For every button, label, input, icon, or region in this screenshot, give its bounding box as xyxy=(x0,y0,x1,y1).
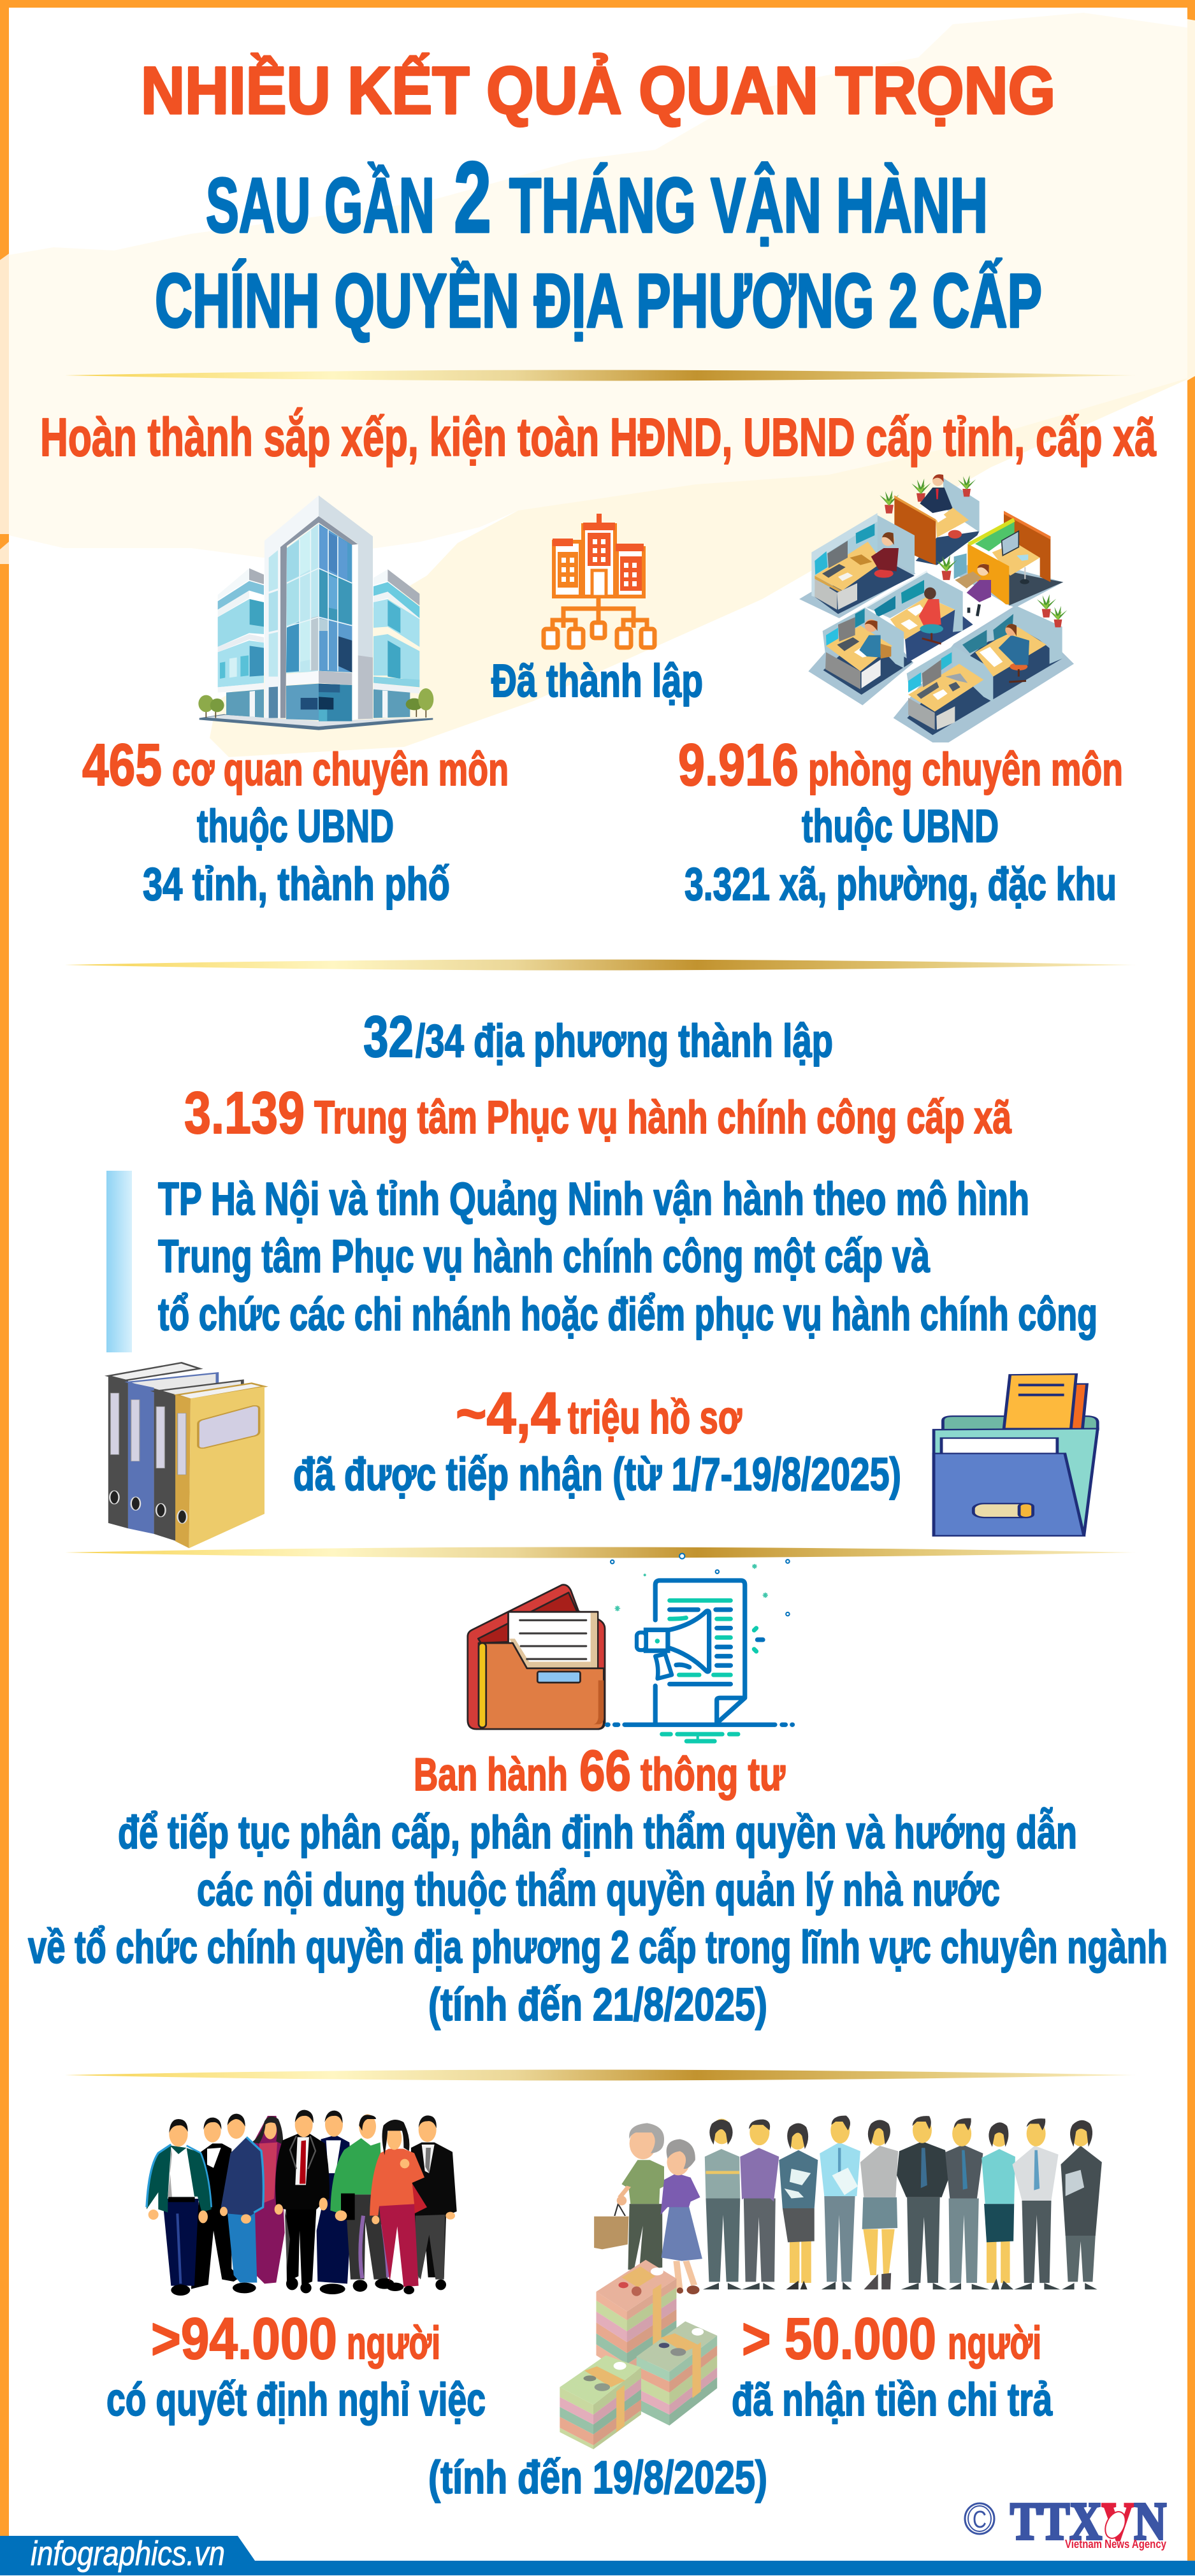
background cream shape xyxy=(0,13,1195,757)
stat: 50.000 người: người xyxy=(948,2318,1041,2369)
person 1 xyxy=(703,2118,742,2289)
stat: 3.139 trung tâm xyxy=(184,1080,1012,1146)
title line 1: NHIỀU KẾT QUẢ QUAN TRỌNG xyxy=(141,52,1055,128)
icon: document folder xyxy=(468,1585,605,1729)
right stat: 9.916 phòng chuyên môn: thuộc UBND xyxy=(802,801,999,852)
left stat: 465 cơ quan chuyên môn: thuộc UBND xyxy=(197,801,394,852)
stat: 32/34 địa phương: 32 xyxy=(363,1004,414,1069)
icon: trees xyxy=(198,688,433,718)
person 8 xyxy=(981,2122,1015,2289)
top right cubicle xyxy=(936,511,1050,616)
right stat: 9.916 phòng chuyên môn: 9.916 xyxy=(678,732,799,798)
label: đã thành lập: Đã thành lập xyxy=(491,656,703,707)
icon: blue folder xyxy=(934,1374,1097,1536)
person 5 xyxy=(860,2120,898,2289)
worker: blue jacket xyxy=(220,2114,263,2293)
stat: 66 thông tư xyxy=(414,1739,786,1803)
worker: suit with red tie xyxy=(275,2110,345,2294)
elderly couple xyxy=(594,2123,702,2294)
person 10 xyxy=(1061,2120,1102,2289)
illustration: isometric office cubicles xyxy=(799,474,1074,742)
footer bar: infographics.vn xyxy=(31,2535,225,2573)
text block: thông tư description: (tính đến 21/8/2025) xyxy=(428,1979,767,2030)
worker: back row xyxy=(191,2111,457,2290)
left stat: 465 cơ quan chuyên môn: 34 tỉnh, thành phố xyxy=(143,859,450,910)
logo: copyright mark: C xyxy=(973,2507,987,2533)
stat: 4,4 triệu hồ sơ: ~4,4 xyxy=(456,1381,560,1446)
top left cubicle xyxy=(811,513,915,610)
date note: (tính đến 19/8/2025) xyxy=(428,2452,767,2503)
person 4 xyxy=(820,2116,860,2289)
stat: 94.000 người: >94.000 xyxy=(151,2306,337,2371)
centre cubicle xyxy=(850,570,963,644)
icon: announcement document with megaphone xyxy=(607,1554,792,1742)
bottom cubicles xyxy=(907,595,1067,730)
left stat: 465 cơ quan chuyên môn xyxy=(82,732,509,910)
worker: coral blouse xyxy=(370,2120,427,2294)
stat: 94.000 người xyxy=(106,2306,486,2426)
money stack: rear xyxy=(596,2260,676,2375)
note block: Hà Nội và Quảng Ninh xyxy=(106,1171,1097,1352)
title line 2: SAU GẦN xyxy=(206,162,435,249)
title line 2 xyxy=(206,141,988,254)
top centre cubicle xyxy=(880,474,980,565)
person 2 xyxy=(740,2119,779,2289)
left stat: 465 cơ quan chuyên môn: cơ quan chuyên môn xyxy=(172,744,509,795)
stat: 66 thông tư: thông tư xyxy=(641,1749,786,1800)
stat: 4,4 triệu hồ sơ xyxy=(293,1381,901,1500)
footer bar xyxy=(0,2535,1195,2575)
logo: TTXVN: TTXVN xyxy=(1010,2492,1166,2551)
illustration: queue of people xyxy=(594,2116,1102,2294)
title line 2: 2 xyxy=(454,141,491,254)
lower left cubicle xyxy=(823,607,904,690)
right stat: 9.916 phòng chuyên môn xyxy=(678,732,1123,910)
left stat: 465 cơ quan chuyên môn: 465 xyxy=(82,732,162,798)
stat: 50.000 người: > 50.000 xyxy=(742,2306,936,2371)
money stack: front xyxy=(560,2355,641,2449)
person 6 xyxy=(897,2116,950,2289)
stat: 32/34 địa phương: /34 địa phương thành lập xyxy=(416,1016,833,1067)
illustration: stacks of money xyxy=(560,2260,717,2449)
worker: green shirt xyxy=(330,2114,394,2292)
stat: 4,4 triệu hồ sơ: đã được tiếp nhận (từ 1/7-19/8/2025) xyxy=(293,1449,901,1500)
icon: organisation tree xyxy=(544,514,655,648)
worker: front left xyxy=(147,2119,212,2296)
stat: 50.000 người: đã nhận tiền chi trả xyxy=(732,2375,1053,2426)
text block: thông tư description xyxy=(28,1807,1168,2030)
stat: 4,4 triệu hồ sơ: triệu hồ sơ xyxy=(568,1393,742,1444)
money stack: right xyxy=(637,2321,717,2426)
person 9 xyxy=(1012,2118,1060,2289)
stat: 66 thông tư: 66 xyxy=(579,1739,631,1803)
stat: 50.000 người xyxy=(732,2306,1053,2426)
logo: copyright mark xyxy=(965,2503,994,2534)
illustration: group of nine workers xyxy=(147,2110,457,2296)
stat: 32/34 địa phương xyxy=(363,1004,833,1069)
person 3 xyxy=(779,2124,818,2289)
stat: 94.000 người: có quyết định nghỉ việc xyxy=(106,2375,486,2426)
stat: 66 thông tư: Ban hành xyxy=(414,1749,568,1800)
note block: Hà Nội và Quảng Ninh: Trung tâm Phục vụ hành chính công một cấp và xyxy=(158,1231,931,1282)
stat: 94.000 người: người xyxy=(347,2318,440,2369)
logo: TTXVN: Vietnam News Agency xyxy=(1065,2538,1166,2551)
person 7 xyxy=(945,2118,989,2289)
illustration: office building xyxy=(198,495,433,730)
icon: binders xyxy=(108,1363,264,1548)
stat: 3.139 trung tâm: 3.139 xyxy=(184,1080,305,1146)
